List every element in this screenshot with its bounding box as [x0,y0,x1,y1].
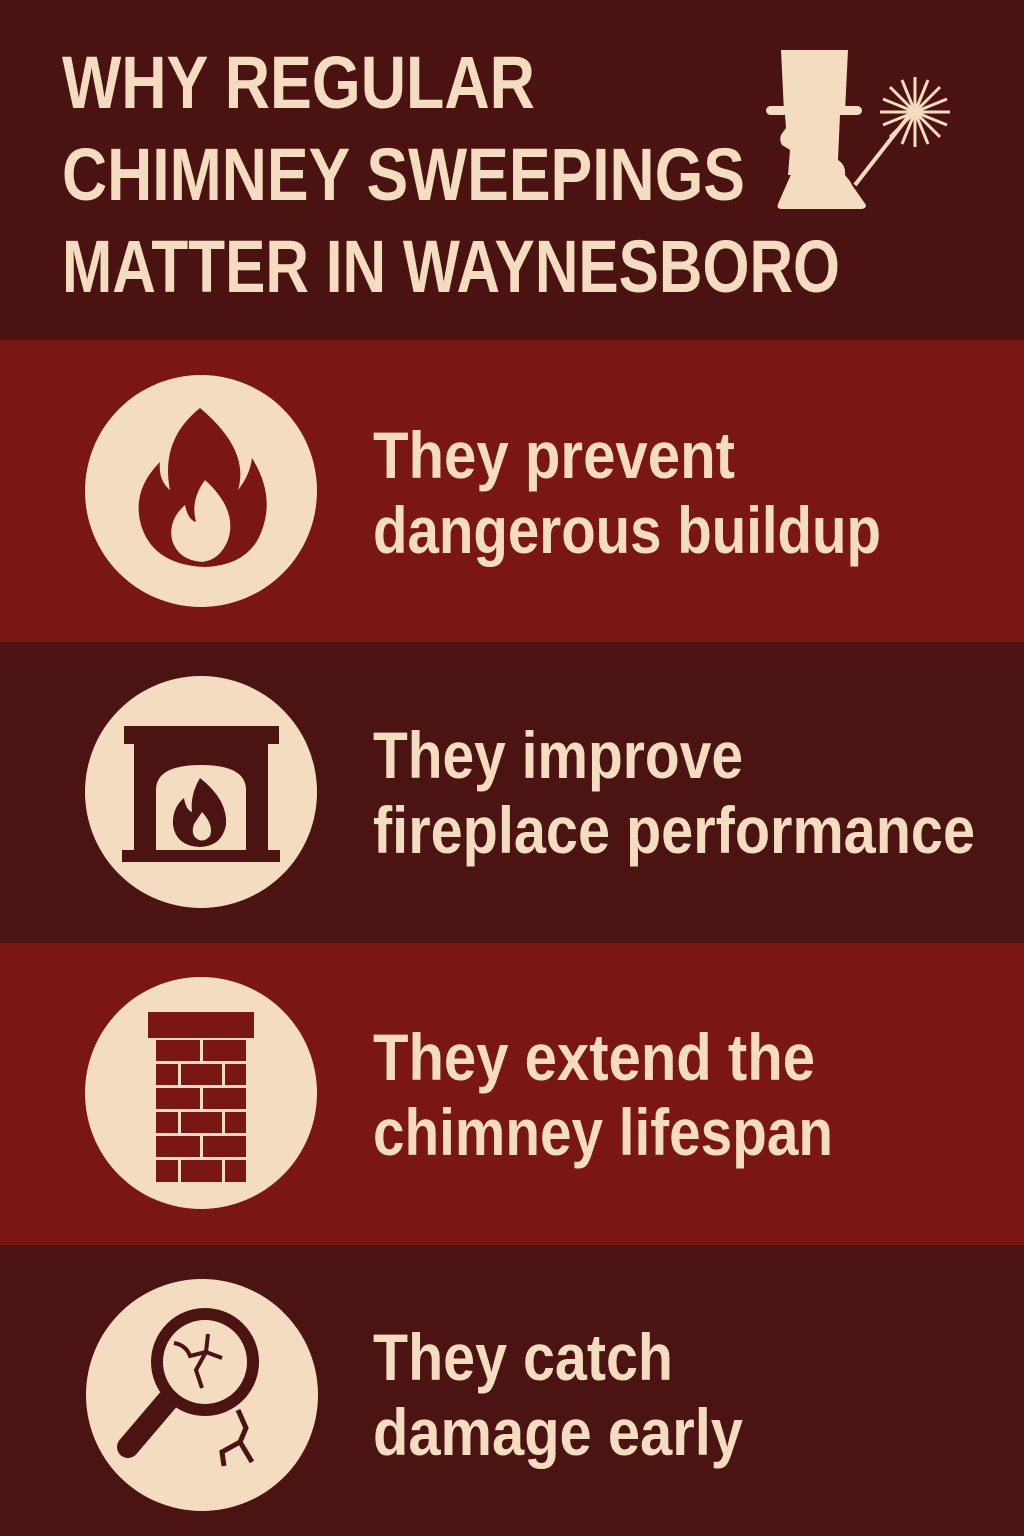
text: catch damage [373,1320,743,1469]
text: extend lifespan [373,1020,833,1169]
text: prevent buildup: They prevent [373,418,735,492]
text: prevent buildup: dangerous buildup [373,493,881,567]
icon: magnifier with crack [86,1279,318,1511]
text: catch damage: They catch [373,1320,673,1394]
title [62,41,840,308]
title: CHIMNEY SWEEPINGS [62,133,745,216]
text: extend lifespan: They extend the [373,1020,815,1094]
icon: chimney sweep [766,50,950,209]
panel: prevent buildup [85,375,881,607]
text: extend lifespan: chimney lifespan [373,1095,833,1169]
text: prevent buildup [373,418,881,567]
text: catch damage: damage early [373,1395,743,1469]
icon: flame [85,375,317,607]
title: WHY REGULAR [62,41,535,124]
text: improve performance: They improve [373,718,743,792]
icon: chimney bricks [85,977,317,1209]
panel: extend lifespan [85,977,833,1209]
title: MATTER IN WAYNESBORO [62,225,840,308]
panel: improve performance [85,676,975,908]
text: improve performance [373,718,975,867]
panel: catch damage [86,1279,743,1511]
icon: fireplace [85,676,317,908]
